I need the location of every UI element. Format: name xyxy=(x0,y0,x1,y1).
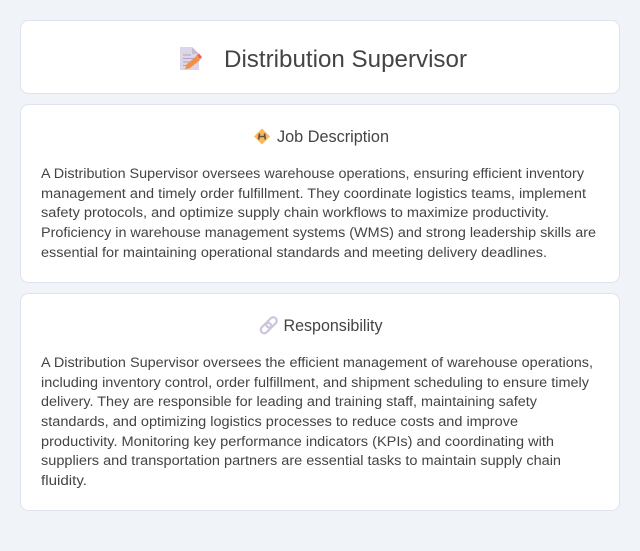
text: responsibility paragraph: productivity. Monitoring key performance indicators (KPIs) and coordinating with xyxy=(41,434,554,450)
text: responsibility paragraph: A Distribution Supervisor oversees the efficient management of warehouse operations, xyxy=(41,355,593,371)
text: responsibility paragraph: suppliers and transportation partners are essential tasks to maintain supply chain xyxy=(41,453,561,469)
panel: responsibility xyxy=(20,294,620,510)
text: responsibility paragraph: delivery. They are responsible for leading and training staff, maintaining safety xyxy=(41,394,538,410)
title: Distribution Supervisor xyxy=(224,46,467,73)
icon: document with pencil xyxy=(180,47,202,70)
heading: responsibility: Responsibility xyxy=(284,317,383,335)
text: responsibility paragraph: standards, and optimizing logistics processes to reduce costs and improve xyxy=(41,414,518,430)
text: job description paragraph xyxy=(41,166,596,261)
icon: chain link xyxy=(259,316,278,335)
text: job description paragraph: A Distribution Supervisor oversees warehouse operations, ensuring efficient inventory xyxy=(41,166,585,182)
heading: job description: Job Description xyxy=(277,128,389,146)
text: responsibility paragraph: fluidity. xyxy=(41,473,87,489)
text: job description paragraph: essential for maintaining operational standards and meeting delivery deadlines. xyxy=(41,245,547,261)
text: responsibility paragraph xyxy=(41,355,593,489)
icon: orange diamond sign xyxy=(254,128,270,144)
text: job description paragraph: Proficiency in warehouse management systems (WMS) and strong leadership skills are xyxy=(41,225,596,241)
text: job description paragraph: management and timely order fulfillment. They coordinate logistics teams, implement xyxy=(41,186,586,202)
panel: job description xyxy=(20,104,620,282)
text: responsibility paragraph: including inventory control, order fulfillment, and shipment scheduling to ensure timely xyxy=(41,375,590,391)
text: job description paragraph: safety protocols, and optimize supply chain workflows to maximize productivity. xyxy=(41,205,549,221)
panel: title card xyxy=(20,20,620,94)
